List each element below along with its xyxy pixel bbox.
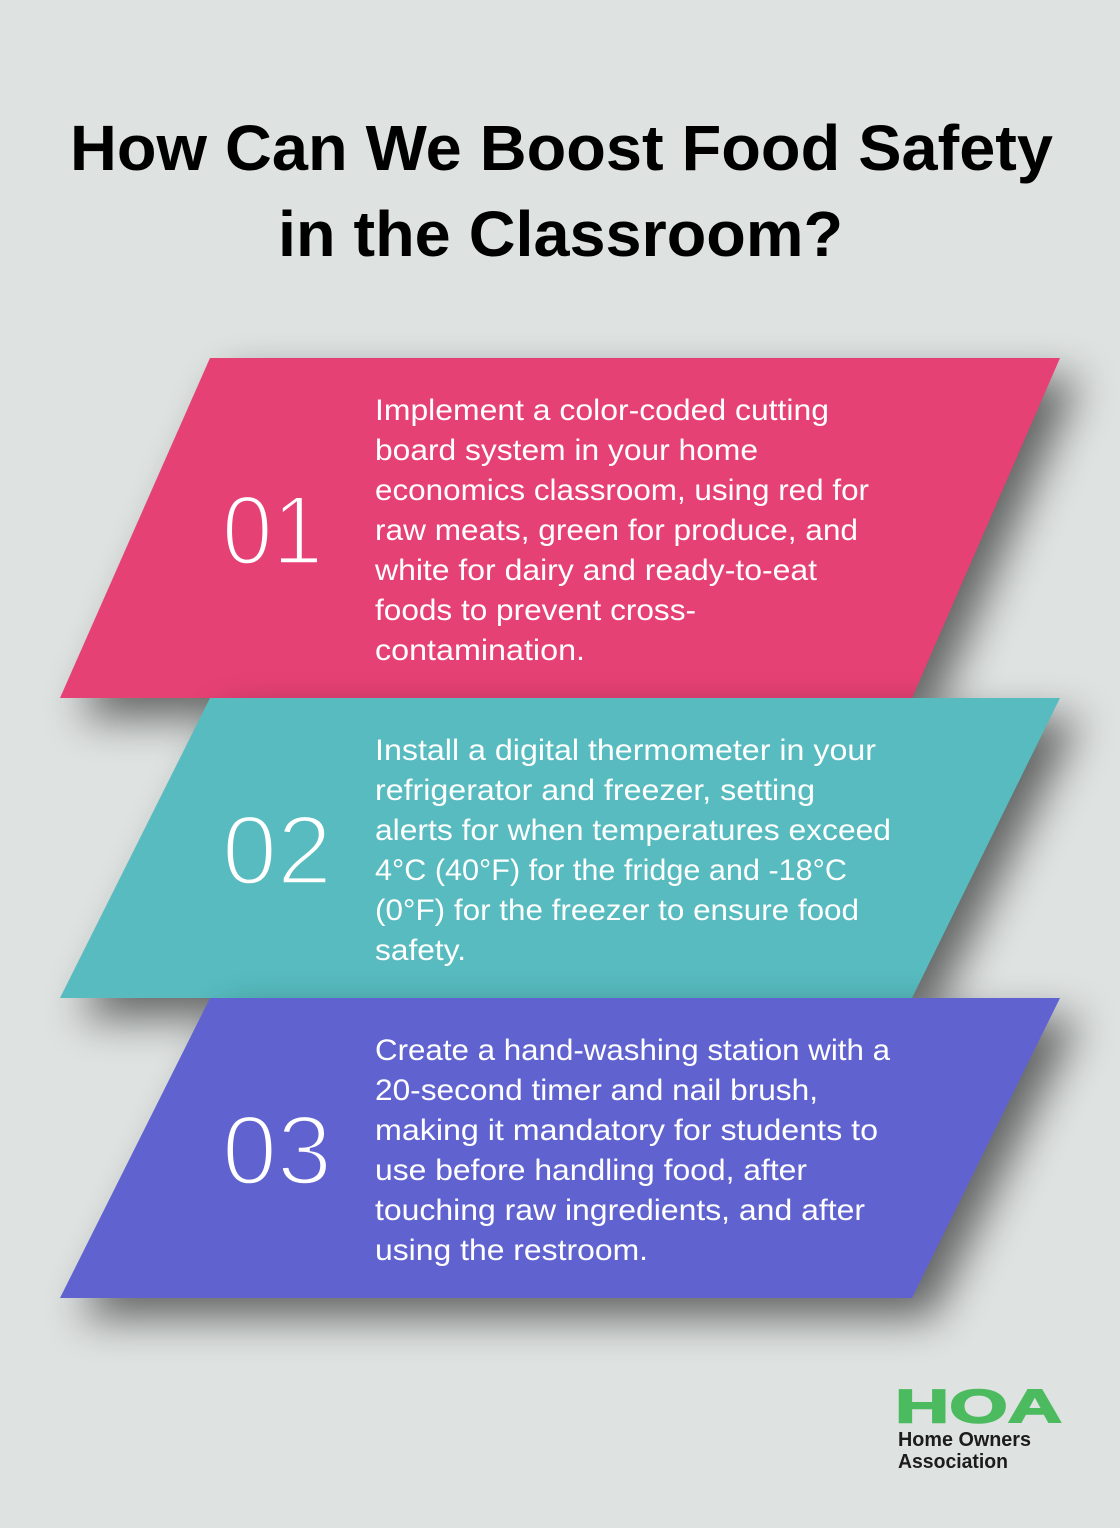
step 3 text: touching raw ingredients, and after: [375, 1194, 865, 1227]
step 1 text: contamination.: [375, 634, 585, 667]
title: [70, 112, 1053, 270]
logo: HOA Home Owners Association: HOA: [895, 1380, 1062, 1432]
step 1 text: raw meats, green for produce, and: [375, 514, 858, 547]
step 1 number: 01: [222, 475, 323, 585]
logo: HOA Home Owners Association: [895, 1380, 1062, 1473]
step 3 text: making it mandatory for students to: [375, 1114, 878, 1147]
step 3 text: use before handling food, after: [375, 1154, 807, 1187]
step 2 text: alerts for when temperatures exceed: [375, 814, 891, 847]
step 1 text: [374, 394, 869, 667]
step 1 text: economics classroom, using red for: [375, 474, 869, 507]
step 1 text: Implement a color-coded cutting: [375, 394, 829, 427]
step 3 text: 20-second timer and nail brush,: [375, 1074, 818, 1107]
step 2 text: 4°C (40°F) for the fridge and -18°C: [375, 854, 847, 887]
panel: step 2: [60, 698, 1080, 1018]
step 2 text: [375, 734, 891, 967]
step 2 text: safety.: [375, 934, 466, 967]
panel: step 1: [60, 358, 1080, 718]
logo: HOA Home Owners Association: Association: [898, 1451, 1008, 1473]
step 3 text: using the restroom.: [375, 1234, 648, 1267]
step 2 text: (0°F) for the freezer to ensure food: [375, 894, 859, 927]
step 3 text: [375, 1034, 891, 1267]
logo: HOA Home Owners Association: Home Owners: [898, 1429, 1031, 1451]
panel: step 3: [60, 998, 1080, 1318]
step 1 text: white for dairy and ready-to-eat: [374, 554, 817, 587]
step 1 text: foods to prevent cross-: [375, 594, 696, 627]
step 2 number: 02: [222, 795, 332, 905]
step 2 text: refrigerator and freezer, setting: [375, 774, 815, 807]
step 3 number: 03: [222, 1095, 332, 1205]
title: How Can We Boost Food Safety: [70, 112, 1053, 184]
title: in the Classroom?: [278, 198, 843, 270]
step 1 text: board system in your home: [375, 434, 758, 467]
step 2 text: Install a digital thermometer in your: [375, 734, 876, 767]
step 3 text: Create a hand-washing station with a: [375, 1034, 891, 1067]
